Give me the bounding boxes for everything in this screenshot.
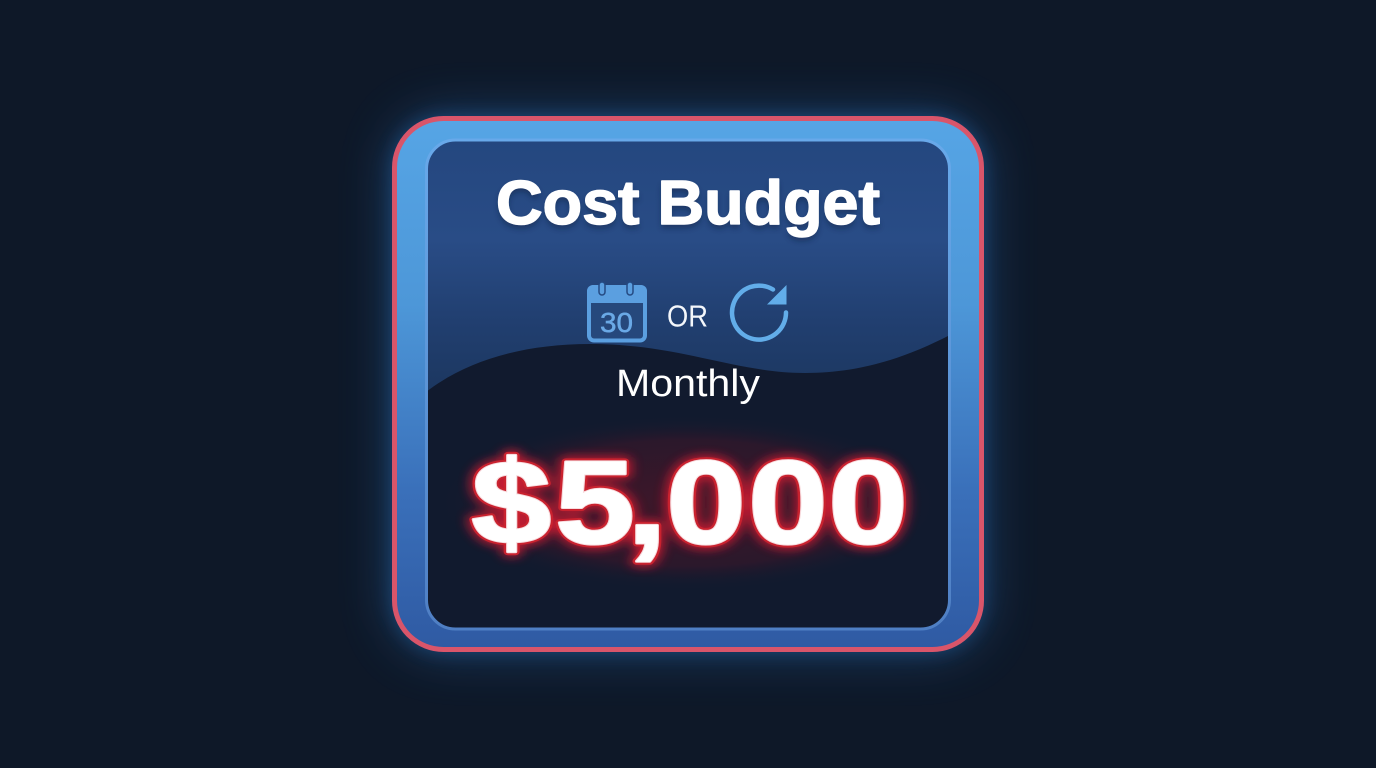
amount: $5,000: $5,000: [472, 436, 908, 568]
icon: calendar 30: 30: [600, 307, 633, 338]
amount: $5,000: [438, 415, 938, 591]
amount: $5,000: $5,000: [472, 436, 908, 568]
amount: $5,000: $5,000: [472, 436, 908, 568]
card frame with red border: [394, 118, 982, 650]
label: OR: OR: [667, 298, 708, 334]
title: Cost Budget: [496, 169, 880, 238]
panel: budget card: [392, 116, 984, 652]
infographic canvas: [365, 89, 1011, 679]
icon: calendar 30: [587, 282, 647, 340]
card outer blue glow: [392, 116, 984, 652]
label: Monthly: Monthly: [616, 363, 760, 405]
title: Cost Budget: [496, 173, 880, 242]
upper panel wave: [426, 139, 950, 392]
inner panel: [426, 139, 950, 629]
amount: $5,000: $5,000: [472, 436, 908, 568]
icon: refresh arrow: [732, 285, 786, 340]
